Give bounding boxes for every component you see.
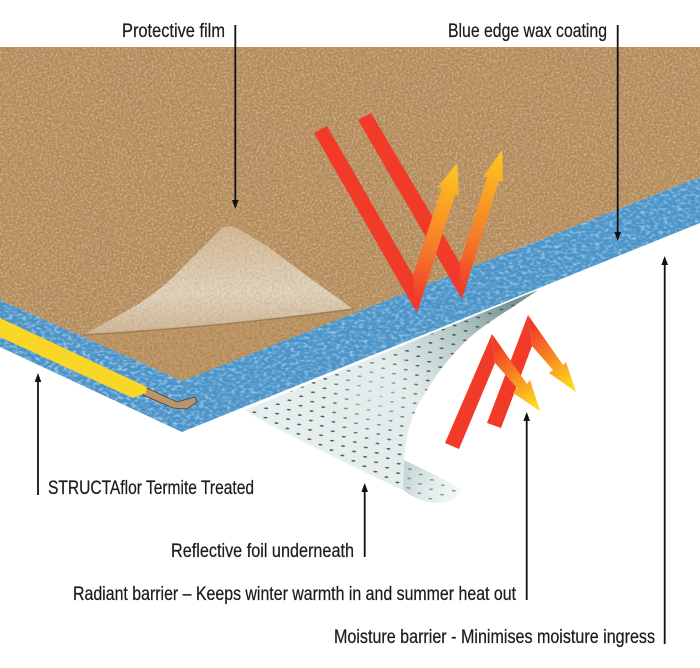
label: STRUCTAflor termite treated xyxy=(35,373,254,499)
incoming and reflected heat arrow, first xyxy=(314,126,459,313)
radiant heat arrow under foil, front xyxy=(445,334,540,449)
label: moisture barrier xyxy=(334,256,668,648)
yellow termite treated strip xyxy=(0,318,147,398)
incoming and reflected heat arrow, second xyxy=(358,113,503,299)
blue edge wax coating xyxy=(0,177,700,432)
label: reflective foil underneath xyxy=(171,483,368,562)
label: STRUCTAflor termite treated: STRUCTAflor Termite Treated xyxy=(48,477,254,499)
label: protective film: Protective film xyxy=(122,20,225,42)
label: radiant barrier: Radiant barrier – Keeps winter warmth in and summer heat out xyxy=(73,583,516,605)
uncovered area below the peeled film xyxy=(83,309,358,381)
label: radiant barrier xyxy=(73,412,530,605)
label: blue edge wax coating: Blue edge wax coating xyxy=(448,20,607,42)
label: protective film xyxy=(122,20,239,209)
radiant heat arrow under foil, rear xyxy=(487,315,576,428)
label: blue edge wax coating xyxy=(448,20,621,241)
board top surface xyxy=(0,47,700,381)
peeled protective film xyxy=(83,226,353,335)
label: reflective foil underneath: Reflective foil underneath xyxy=(171,540,354,562)
reflective foil sheet xyxy=(245,290,538,503)
tongue slot in board edge xyxy=(143,388,197,409)
